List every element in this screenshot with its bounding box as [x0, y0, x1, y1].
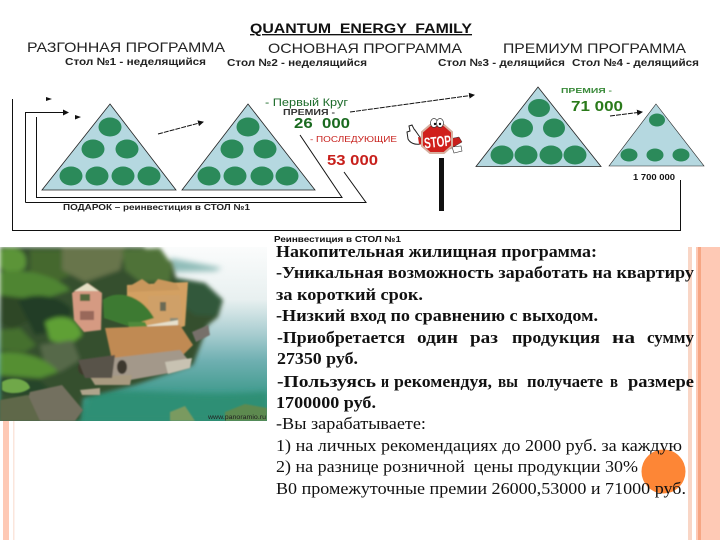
- bullet: payout: [276, 372, 694, 412]
- title: QUANTUM ENERGY FAMILY: [250, 21, 472, 36]
- heading: table names: Стол №2 - неделящийся: [227, 57, 367, 69]
- bullet: unique opportunity: [276, 263, 695, 304]
- bullet: one purchase: [277, 328, 694, 368]
- chart: table 4 triangle: [609, 104, 704, 166]
- label: gift reinvestment: ПОДАРОК – реинвестиция в СТОЛ №1: [63, 202, 250, 212]
- callout: final payout: 1 700 000: [633, 173, 676, 182]
- bullet: payout: 1700000 руб.: [276, 393, 376, 412]
- bullet: one purchase: сумму: [647, 328, 694, 347]
- list: earnings: В0 промежуточные премии 26000,53000 и 71000 руб.: [276, 479, 686, 498]
- bullet: payout: и: [381, 372, 389, 391]
- photo: coastal villa: [0, 247, 267, 421]
- text block: housing program: [276, 242, 695, 498]
- bullet: payout: рекомендуя,: [394, 372, 492, 391]
- bullet: payout: получаете: [527, 372, 603, 391]
- callout: first round bonus: ПРЕМИЯ -: [283, 108, 335, 117]
- bullet: one purchase: на: [612, 328, 636, 347]
- list: earnings: 2) на разнице розничной цены продукции 30%: [276, 457, 638, 476]
- heading: table names: Стол №3 - делящийся: [438, 57, 565, 69]
- heading: program names: ПРЕМИУМ ПРОГРАММА: [503, 40, 687, 56]
- chart: table 1 triangle: [42, 104, 176, 190]
- icon: stop sign character: STOP: [423, 133, 452, 152]
- chart: table 2 triangle: [182, 104, 315, 190]
- cliff and foliage base: [0, 247, 223, 421]
- callout: subsequent rounds bonus: 53 000: [327, 152, 378, 169]
- bullet: one purchase: один: [417, 328, 458, 347]
- list: earnings: -Вы зарабатываете:: [276, 414, 426, 433]
- label: reinvestment note: Реинвестиция в СТОЛ №1: [274, 234, 401, 244]
- panel: right decorative stripes: [688, 247, 720, 540]
- heading: program names: [27, 39, 687, 56]
- panel: left decorative stripes: [3, 421, 14, 540]
- icon: stop sign character: [407, 118, 462, 211]
- heading: table names: Стол №1 - неделящийся: [65, 56, 206, 68]
- bullet: payout: вы: [498, 372, 518, 391]
- callout: first round bonus: 26 000: [294, 115, 350, 132]
- label: watermark: www.panoramio.ru: [207, 415, 266, 421]
- bullet: unique opportunity: за короткий срок.: [276, 285, 423, 304]
- villas and rocks: [0, 279, 267, 421]
- bullet: one purchase: 27350 руб.: [277, 349, 358, 368]
- bullet: one purchase: продукция: [512, 328, 600, 347]
- subheading: program name: Накопительная жилищная программа:: [276, 242, 597, 261]
- callout: premium bonus: 71 000: [571, 98, 623, 115]
- heading: table names: Стол №4 - делящийся: [572, 57, 699, 69]
- callout: subsequent rounds bonus: - ПОСЛЕДУЮЩИЕ: [310, 134, 397, 144]
- bullet: one purchase: -Приобретается: [277, 328, 405, 347]
- list: earnings: 1) на личных рекомендациях до 2000 руб. за каждую: [276, 436, 682, 455]
- callout: first round bonus: - Первый Круг: [265, 97, 348, 109]
- arrowheads: loop tops: [46, 97, 81, 120]
- bullet: payout: в: [610, 372, 618, 391]
- arrows between tables: [158, 95, 642, 134]
- list: earnings: [276, 414, 686, 498]
- distant hill and bay water: [80, 258, 267, 421]
- chart: table 3 triangle: [476, 87, 601, 166]
- bullet: payout: -Пользуясь: [277, 372, 376, 391]
- bullet: unique opportunity: -Уникальная возможность заработать на квартиру: [276, 263, 695, 282]
- decoration: orange circle: [642, 450, 686, 494]
- bullet: low entry: -Низкий вход по сравнению с выходом.: [276, 306, 598, 325]
- heading: program names: РАЗГОННАЯ ПРОГРАММА: [27, 39, 226, 55]
- callout: premium bonus: ПРЕМИЯ -: [561, 86, 613, 95]
- callout: first round bonus: [265, 97, 350, 132]
- heading: table names: [65, 56, 699, 69]
- heading: program names: ОСНОВНАЯ ПРОГРАММА: [268, 40, 463, 56]
- callout: subsequent rounds bonus: [310, 134, 397, 169]
- bullet: payout: размере: [628, 372, 694, 391]
- flow lines: reinvestment loops: [12, 99, 680, 230]
- bullet: one purchase: раз: [470, 328, 498, 347]
- callout: premium bonus: [561, 86, 623, 115]
